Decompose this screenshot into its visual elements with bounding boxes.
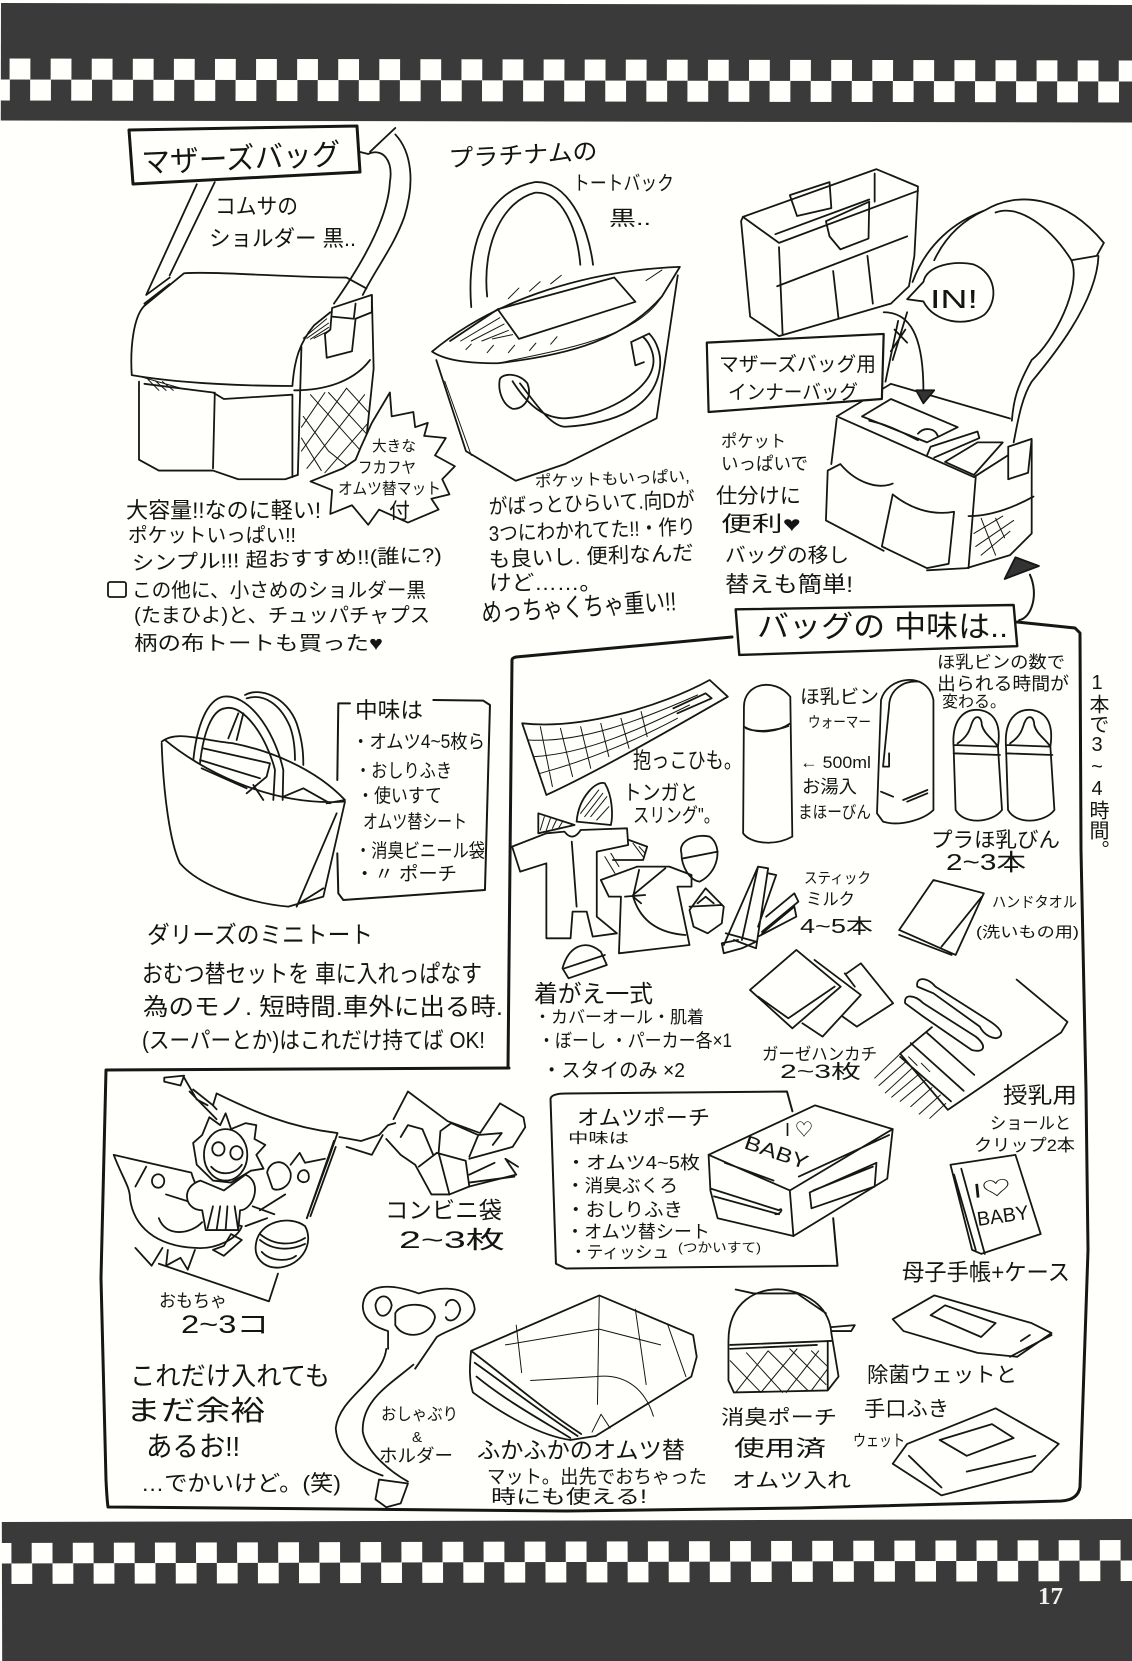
item: diaper pouch list: ・オムツ4~5枚: [566, 1153, 700, 1173]
item: plastic feeding bottles: 変わる。: [942, 693, 1006, 711]
label: Platinum tote black: [448, 138, 674, 230]
item: maternal handbook and case: BABY: [976, 1202, 1030, 1231]
text block: still room to spare: あるお!!: [146, 1431, 240, 1462]
speech bubble: IN!: [907, 263, 993, 322]
text block: Platinum tote comments: めっちゃくちゃ重い!!: [481, 586, 677, 628]
label box: inner bag for mother's bag: インナーバッグ: [728, 381, 858, 404]
footer band: checkered border with page number: [0, 1519, 1132, 1661]
illustration: Platinum tote bag: [432, 182, 680, 481]
item: deodorant pouch: オムツ入れ: [732, 1470, 851, 1492]
text block: shoulder bag comments: この他に、小さめのショルダー黒: [132, 579, 426, 602]
label: Platinum tote black: 黒..: [609, 208, 651, 230]
item: fluffy changing mat: ふかふかのオムツ替: [477, 1437, 685, 1463]
item: diaper pouch list: [551, 1091, 838, 1268]
item: nursing shawl and clips: ショールと: [990, 1114, 1071, 1133]
note icon: [108, 582, 126, 597]
item: stick milk: ミルク: [806, 890, 855, 909]
text block: Platinum tote comments: も良いし. 便利なんだ: [488, 542, 694, 572]
item: baby sling: トンガと: [623, 782, 698, 805]
item: change of clothes: ・カバーオール・肌着: [534, 1008, 704, 1027]
item: convenience store bags: コンビニ袋: [385, 1197, 502, 1223]
text block: shoulder bag comments: ポケットいっぱい!!: [128, 524, 296, 547]
text block: shoulder bag comments: シンプル!!! 超おすすめ!!(誰に?): [132, 544, 442, 575]
starburst text: 付: [389, 500, 410, 523]
illustration: black Comme Ca shoulder bag: [131, 128, 411, 479]
list box: mini tote contents: [337, 698, 490, 900]
starburst shape: [310, 392, 455, 525]
item: antibacterial wet wipes: ウェット: [853, 1432, 905, 1450]
box outline: [337, 700, 490, 900]
list text: ・おしりふき: [355, 761, 452, 782]
item: plastic feeding bottles: 2~3本: [946, 849, 1026, 875]
item: diaper pouch list: ・ティッシュ: [570, 1243, 669, 1262]
label: Comme Ca shoulder black: コムサの: [215, 194, 298, 219]
text block: shoulder bag comments: (たまひよ)と、チュッパチャプス: [134, 605, 430, 627]
item: bottle warmer: [800, 680, 933, 823]
item: plastic feeding bottles: ほ乳ビンの数で: [937, 653, 1065, 672]
item: toys: 2~3コ: [181, 1311, 269, 1339]
item: nursing shawl and clips: [875, 979, 1077, 1155]
item: hand towel: (洗いもの用): [976, 924, 1079, 941]
list text: ・オムツ4~5枚ら: [352, 731, 485, 753]
text block: inner bag comments: いっぱいで: [721, 454, 808, 474]
item: bottle warmer: ウォーマー: [808, 714, 871, 731]
item: baby sling: [522, 680, 742, 827]
item: bottle warmer: ほ乳ビン: [800, 686, 879, 708]
item: plastic feeding bottles: プラほ乳びん: [931, 829, 1060, 852]
item: toys: [114, 1076, 395, 1339]
item: stick milk: スティック: [804, 870, 871, 887]
text block: inner bag comments: 便利♥: [721, 513, 801, 536]
list text: オムツ替シート: [363, 811, 467, 833]
item: fluffy changing mat: 時にも使える!: [491, 1486, 647, 1508]
item: baby sling: スリング"。: [633, 804, 720, 827]
item: toys: おもちゃ: [159, 1291, 227, 1311]
item: pacifier and holder: ホルダー: [379, 1446, 453, 1466]
item: hand towel: [899, 880, 1079, 955]
label box: inner bag for mother's bag: マザーズバッグ用: [719, 353, 876, 376]
text block: inner bag comments: バッグの移し: [725, 544, 849, 567]
label: Comme Ca shoulder black: [209, 194, 356, 251]
text block: inner bag comments: 替えも簡単!: [725, 572, 853, 597]
item: change of clothes: [512, 783, 732, 1082]
starburst text: 大きな: [372, 438, 416, 455]
speech bubble: IN!: IN!: [930, 284, 978, 314]
item: diaper pouch list: ・消臭ぶくろ: [566, 1176, 678, 1196]
text block: still room to spare: [126, 1361, 341, 1496]
item: maternal handbook and case: 母子手帳+ケース: [902, 1259, 1070, 1285]
item: nursing shawl and clips: 授乳用: [1003, 1083, 1077, 1108]
text block: inner bag comments: [716, 432, 853, 597]
page number: 17: [1038, 1584, 1063, 1610]
text block: still room to spare: まだ余裕: [126, 1395, 265, 1426]
item: pacifier and holder: [336, 1287, 475, 1507]
list text: ・消臭ビニール袋: [355, 840, 485, 862]
item: diaper pouch illustration: BABY: [741, 1132, 811, 1174]
text block: Platinum tote comments: けど……。: [489, 572, 602, 595]
item: diaper pouch list: オムツポーチ: [577, 1107, 710, 1130]
item: maternal handbook and case: [902, 1155, 1070, 1285]
item: diaper pouch list: (つかいすて): [678, 1240, 761, 1255]
item: plastic feeding bottles: 出られる時間が: [937, 674, 1069, 694]
illustration: Dalys mini tote: [162, 692, 345, 907]
vertical note: 3 to 4 hours per bottle: 1本で3~4時間。: [1086, 672, 1109, 860]
text block: shoulder bag comments: 柄の布トートも買った♥: [134, 632, 383, 655]
text block: Platinum tote comments: 3つにわかれてた!!・作り: [488, 516, 696, 546]
item: thermos flask: お湯入: [802, 777, 857, 797]
item: deodorant pouch: [721, 1289, 855, 1492]
item: deodorant pouch: 使用済: [734, 1436, 826, 1461]
list text: 中味は: [355, 698, 423, 723]
item: antibacterial wet wipes: 手口ふき: [864, 1398, 949, 1421]
item: diaper pouch list: ・オムツ替シート: [566, 1222, 710, 1242]
item: maternal handbook and case: I♡: [972, 1177, 1012, 1203]
starburst text: [338, 438, 441, 523]
item: stick milk: [722, 867, 873, 953]
item: hand towel: ハンドタオル: [992, 894, 1077, 911]
callout: starburst about changing mat: [310, 392, 455, 525]
item: diaper pouch list: 中味は: [568, 1130, 629, 1146]
text block: shoulder bag comments: [108, 498, 442, 655]
list text: ・〃 ポーチ: [355, 863, 457, 885]
item: fluffy changing mat: [470, 1295, 707, 1508]
upper contents panel outline: [508, 637, 732, 1068]
label: Platinum tote black: プラチナムの: [448, 138, 598, 173]
item: thermos flask: [743, 685, 871, 843]
list text: ・使いすて: [357, 785, 442, 807]
text block: Platinum tote comments: [481, 468, 696, 628]
text block: inner bag comments: 仕分けに: [716, 485, 801, 508]
item: change of clothes: ・ぼーし ・パーカー各×1: [538, 1030, 732, 1052]
text block: Platinum tote comments: がばっとひらいて.向Dが: [488, 489, 695, 519]
title: マザーズバッグ: [129, 126, 360, 184]
starburst text: フカフヤ: [358, 460, 416, 477]
panel frames: contents of the bag: [101, 622, 1088, 1511]
illustration: shoulder bag with inner bag: [826, 199, 1104, 570]
label: Comme Ca shoulder black: ショルダー 黒..: [209, 226, 356, 251]
text block: mini tote description: (スーパーとか)はこれだけ持てば OK!: [142, 1027, 485, 1053]
item: pacifier and holder: &: [412, 1429, 422, 1446]
item: gauze handkerchiefs: [750, 950, 893, 1083]
item: convenience store bags: [385, 1091, 525, 1254]
heading box: what's inside the bag: バッグの 中味は..: [757, 611, 1008, 644]
text block: still room to spare: …でかいけど。(笑): [141, 1471, 341, 1496]
starburst text: オムツ替マット: [338, 480, 441, 498]
text block: mini tote description: 為のモノ. 短時間.車外に出る時.: [143, 994, 503, 1021]
arrow: from heading to inner bag: [1005, 557, 1039, 620]
text block: mini tote description: [142, 922, 503, 1053]
text block: still room to spare: これだけ入れても: [130, 1361, 330, 1391]
item: thermos flask: まほーびん: [798, 803, 871, 822]
item: antibacterial wet wipes: [853, 1295, 1052, 1450]
list text: [352, 698, 485, 885]
item: baby sling: 抱っこひも。: [633, 748, 742, 773]
header band: checkered border: [0, 3, 1132, 122]
text block: inner bag comments: ポケット: [721, 432, 786, 451]
item: change of clothes: 着がえ一式: [534, 981, 653, 1008]
item: fluffy changing mat: マット。出先でおちゃった: [487, 1466, 707, 1488]
item: thermos flask: ← 500ml: [800, 753, 871, 772]
text block: shoulder bag comments: 大容量!!なのに軽い!: [126, 498, 321, 523]
title: マザーズバッグ: マザーズバッグ: [141, 138, 341, 180]
item: diaper pouch illustration: [709, 1105, 893, 1236]
text block: mini tote description: ダリーズのミニトート: [147, 922, 373, 949]
illustration: inner bag organiser: [741, 169, 918, 336]
label box: inner bag for mother's bag: [707, 334, 884, 412]
text block: Platinum tote comments: ポケットもいっぱい,: [535, 468, 690, 491]
item: diaper pouch list: ・おしりふき: [566, 1200, 683, 1221]
item: convenience store bags: 2~3枚: [399, 1227, 505, 1254]
label: Platinum tote black: トートバック: [573, 172, 674, 195]
item: gauze handkerchiefs: 2~3枚: [780, 1061, 861, 1083]
text block: mini tote description: おむつ替セットを 車に入れっぱなす: [142, 961, 482, 988]
item: pacifier and holder: おしゃぶり: [381, 1405, 458, 1424]
item: hand and mouth wipes: [893, 1408, 1059, 1495]
item: change of clothes: ・スタイのみ ×2: [542, 1059, 685, 1082]
item: gauze handkerchiefs: ガーゼハンカチ: [762, 1045, 877, 1064]
heading box: what's inside the bag: [736, 605, 1017, 655]
item: antibacterial wet wipes: 除菌ウェットと: [867, 1364, 1017, 1387]
contents outer frame: [101, 622, 1088, 1511]
item: deodorant pouch: 消臭ポーチ: [721, 1406, 837, 1429]
item: plastic feeding bottles: [931, 653, 1069, 875]
item: diaper pouch illustration: I ♡: [785, 1120, 813, 1140]
item: nursing shawl and clips: クリップ2本: [974, 1136, 1075, 1155]
item: stick milk: 4~5本: [800, 915, 873, 938]
